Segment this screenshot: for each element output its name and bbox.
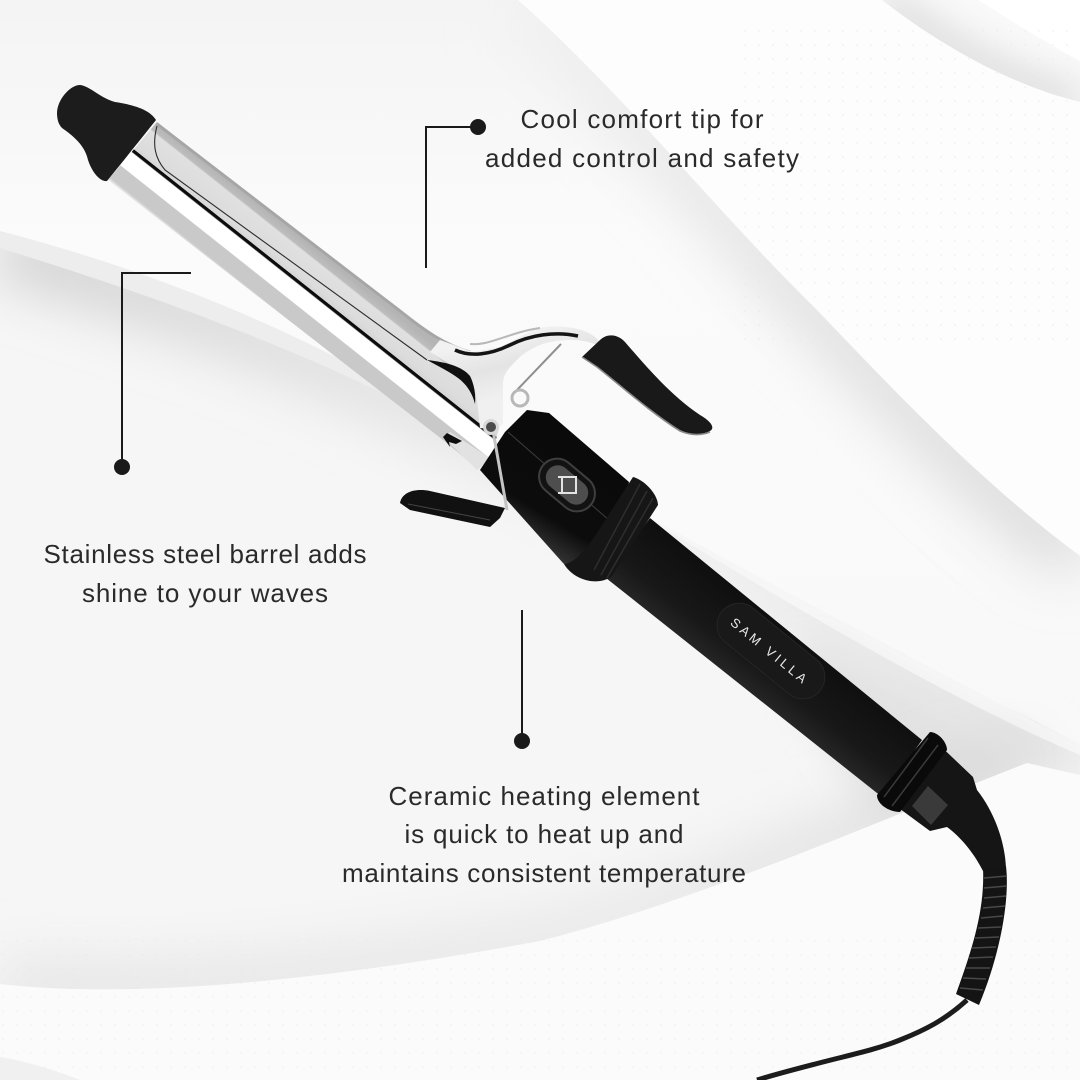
marker dot: [514, 733, 530, 749]
barrel thin seam: [155, 126, 427, 360]
rear boot: [892, 738, 1006, 871]
controller body: [480, 410, 629, 578]
callout: ceramic heating element: [342, 610, 746, 888]
callout text: shine to your waves: [82, 578, 328, 608]
ribbed collar: [564, 477, 658, 581]
clamp wire: [492, 425, 507, 510]
callout text: maintains consistent temperature: [342, 858, 746, 888]
marker dot: [470, 119, 486, 135]
leader line: [426, 127, 476, 268]
callout text: added control and safety: [485, 143, 799, 173]
callout: cool tip: [426, 104, 799, 268]
power switch: [532, 451, 602, 519]
leader line: [521, 610, 523, 740]
cool tip: [57, 85, 156, 181]
clamp lever: [582, 335, 712, 435]
barrel: [108, 122, 500, 468]
thumb rest: [400, 490, 505, 527]
barrel top shade: [157, 124, 470, 352]
callout text: Stainless steel barrel adds: [44, 539, 366, 569]
handle: [606, 518, 922, 797]
hinge rings: [512, 390, 528, 406]
strain relief: [956, 866, 1007, 1005]
callout text: is quick to heat up and: [404, 819, 684, 849]
callout text: Cool comfort tip for: [520, 104, 764, 134]
clamp arm: [427, 326, 600, 430]
logo plate and brand: SAM VILLA: [728, 615, 810, 686]
callout: stainless steel barrel: [44, 273, 366, 608]
leader line: [122, 273, 191, 465]
marker dot: [114, 459, 130, 475]
power cord: [757, 1000, 967, 1080]
rear barrel clip: [443, 432, 490, 470]
rear glossy ring: [877, 732, 947, 812]
callout text: Ceramic heating element: [388, 781, 700, 811]
logo plate and brand: [708, 594, 834, 708]
